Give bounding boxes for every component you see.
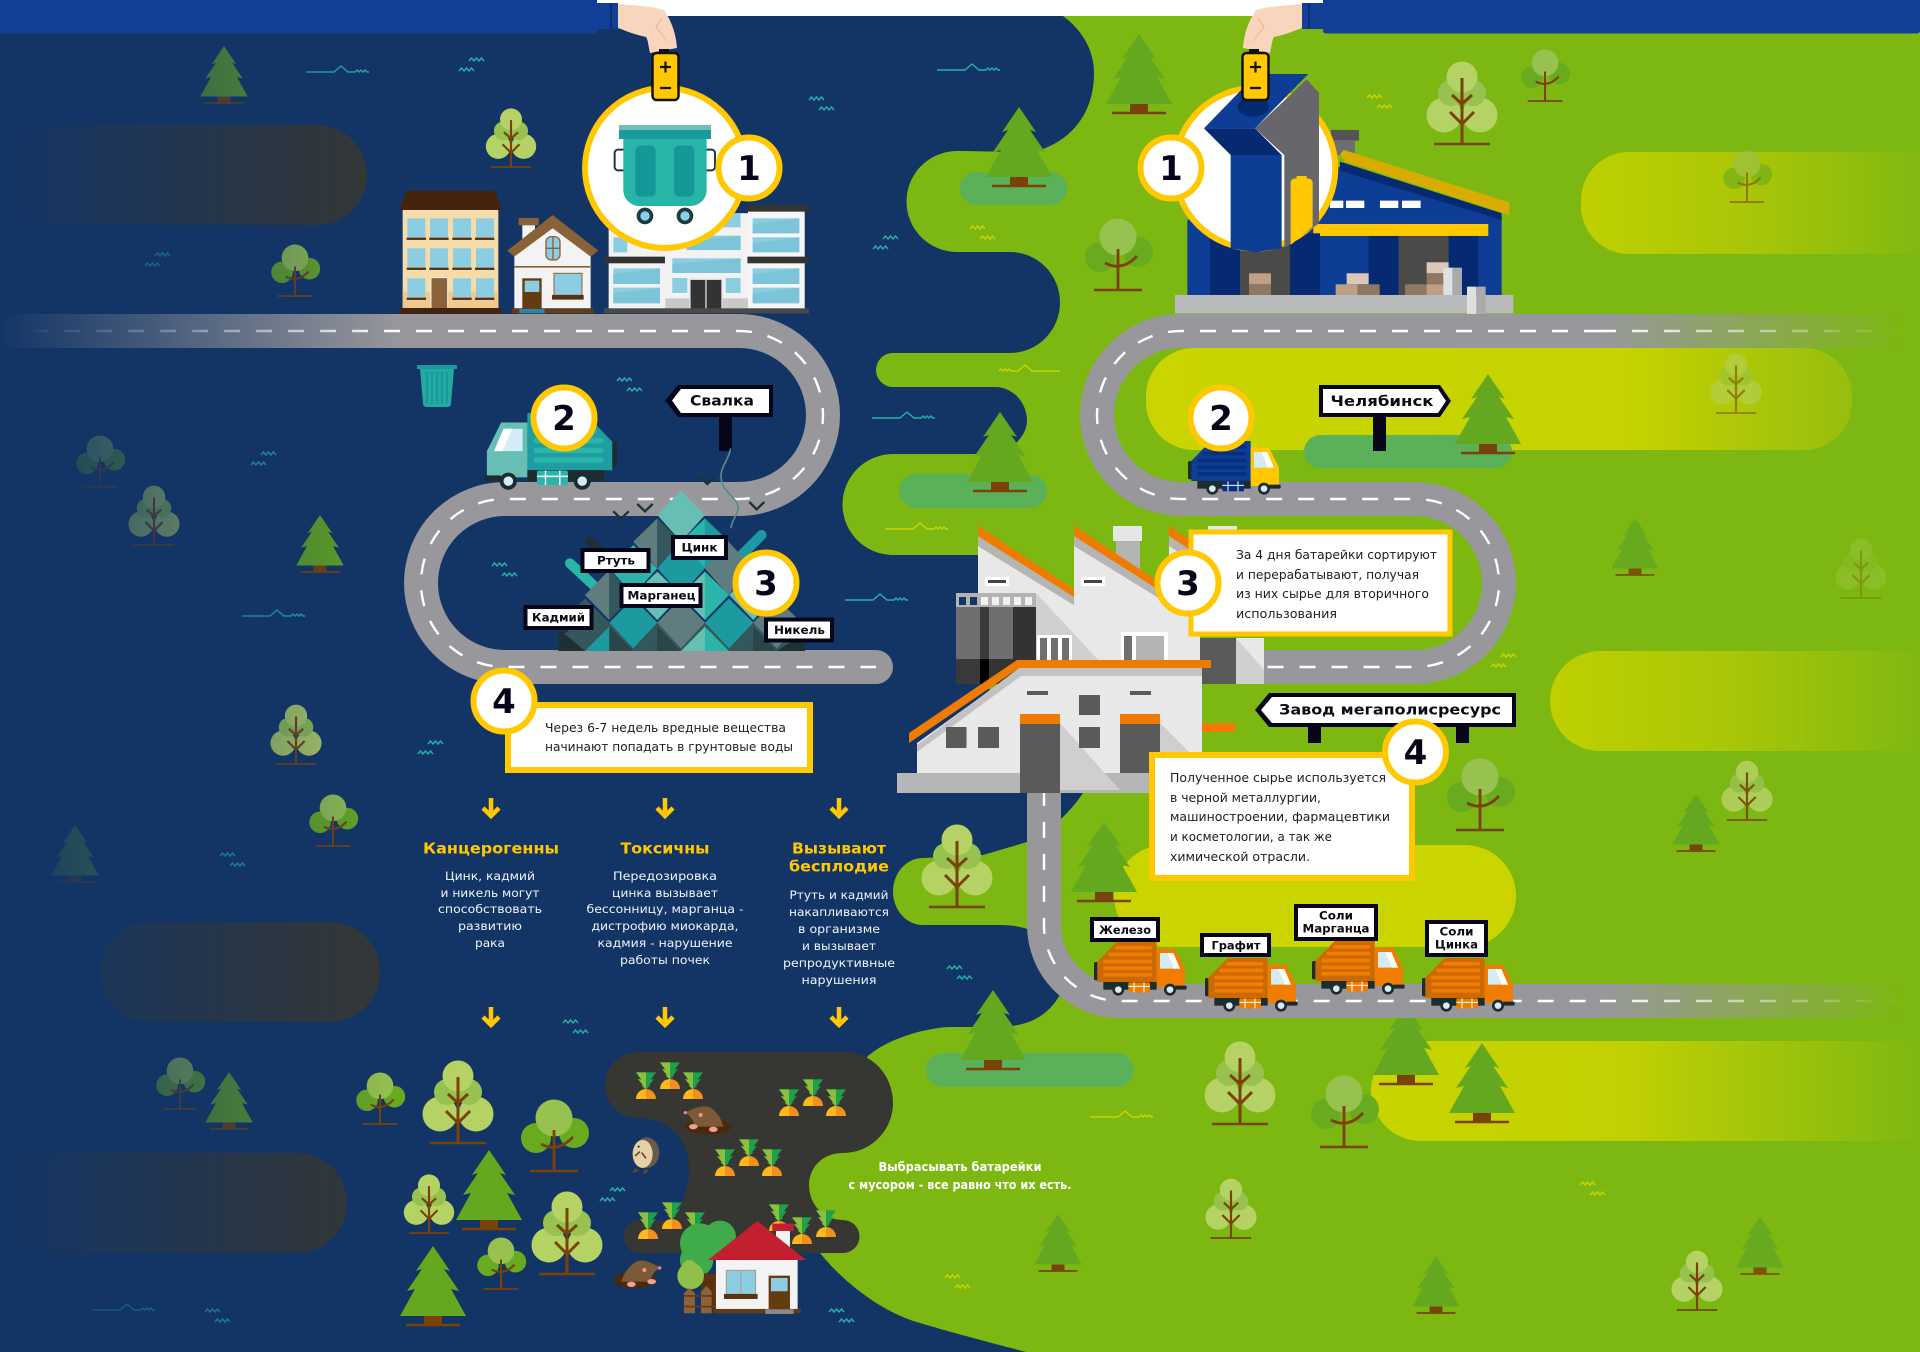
label: Никель: Никель [774, 623, 825, 637]
bottom note: Выбрасывать батарейки [878, 1160, 1042, 1174]
sign: Завод мегаполисресурс [1255, 693, 1516, 743]
column: Токсичны: работы почек [620, 953, 710, 967]
callout: step 4 left: Через 6-7 недель вредные вещества [545, 721, 786, 735]
column: Токсичны [586, 840, 744, 967]
orange truck: Железо [1092, 919, 1187, 996]
number badge 4 right [1385, 722, 1446, 782]
number badge 2 left [534, 388, 594, 448]
column: Вызывают бесплодие: Вызывают [792, 840, 886, 858]
column: Вызывают бесплодие: накапливаются [789, 905, 889, 919]
factory Мегаполисресурс [897, 526, 1264, 793]
battery left [652, 49, 678, 100]
pill: green 3 [1304, 435, 1512, 468]
icon: bin circle (left step 1) [585, 88, 745, 248]
pill: lime fading 3 [1550, 651, 1920, 751]
number badge 4 right: 4 [1404, 733, 1427, 773]
column: Вызывают бесплодие: нарушения [802, 973, 876, 987]
column: Вызывают бесплодие: Ртуть и кадмий [790, 888, 888, 902]
column: Токсичны: цинка вызывает [612, 886, 718, 900]
label: Цинк: Цинк [682, 540, 718, 554]
label: Кадмий [526, 607, 592, 628]
orange truck: Соли Цинка: Соли [1440, 924, 1474, 938]
callout: step 4 right: в черной металлургии, [1170, 791, 1321, 805]
column: Вызывают бесплодие: в организме [798, 922, 880, 936]
number badge 3 left: 3 [754, 564, 778, 604]
carrots in soil [636, 1062, 846, 1244]
orange truck: Соли Цинка [1422, 922, 1515, 1012]
label: Цинк [673, 537, 726, 558]
battery right [1242, 49, 1268, 100]
column: Вызывают бесплодие: репродуктивные [783, 956, 895, 970]
trees on navy side [51, 46, 603, 1325]
recycling plant on the right [1175, 74, 1513, 314]
sign: Челябинск: Челябинск [1330, 394, 1434, 410]
label: Ртуть [582, 550, 648, 571]
number badge 2 left: 2 [552, 399, 576, 439]
callout: step 4 right: и косметологии, а так же [1170, 830, 1332, 844]
callout: step 3 right: из них сырье для вторичного [1236, 587, 1429, 601]
number badge 2 right [1190, 388, 1252, 448]
number badge 3 left [736, 552, 796, 614]
callout: step 4 right [1152, 755, 1412, 878]
callout: step 3 right: и перерабатывают, получая [1236, 568, 1419, 582]
callout: step 4 left: начинают попадать в грунтовые воды [545, 740, 793, 754]
label: Марганец: Марганец [628, 588, 696, 602]
label: Никель [766, 620, 832, 640]
white top band [597, 0, 1323, 16]
sign: Челябинск [1319, 385, 1451, 451]
number badge 3 right [1158, 552, 1218, 614]
pill: lime fading 2 [1146, 348, 1852, 450]
column: Канцерогенны: рака [475, 936, 505, 950]
toxic waste pile [558, 448, 805, 651]
orange truck: Графит: Графит [1212, 938, 1261, 952]
orange truck: Железо: Железо [1099, 923, 1151, 937]
callout: step 4 left [508, 705, 810, 770]
pill: green 2 [899, 474, 1047, 508]
column: Токсичны: дистрофию миокарда, [592, 919, 738, 933]
pill: lime fading 4 [1371, 1041, 1920, 1141]
road: right upper serpentine [1097, 314, 1900, 667]
buildings: city on the left [399, 191, 809, 314]
callout: step 4 right: машиностроении, фармацевтики [1170, 810, 1390, 824]
icon: small trash can [417, 365, 457, 407]
number badge 1 left [718, 138, 780, 198]
number badge 4 left [474, 670, 534, 732]
mole upper [684, 1106, 732, 1135]
number badge 1 left: 1 [737, 149, 761, 189]
teal garbage truck [484, 413, 617, 490]
arrows row 1 [483, 798, 847, 816]
orange truck: Соли Цинка: Цинка [1435, 938, 1478, 952]
callout: step 3 right: использования [1236, 607, 1337, 621]
column: Вызывают бесплодие: бесплодие [789, 858, 889, 876]
callout: step 4 right: Полученное сырье используется [1170, 771, 1386, 785]
trees on green side [922, 34, 1887, 1313]
arrows row 2 [483, 1007, 847, 1025]
orange truck: Соли Марганца: Марганца [1302, 922, 1370, 936]
number badge 2 right: 2 [1209, 399, 1233, 439]
orange truck: Соли Марганца: Соли [1319, 908, 1353, 922]
column: Канцерогенны: развитию [458, 919, 522, 933]
waves: yellow on green [885, 95, 1605, 1288]
dark soil blob [605, 1052, 893, 1253]
sign: Свалка [665, 385, 773, 451]
label: Марганец [622, 585, 700, 606]
column: Канцерогенны: Цинк, кадмий [445, 869, 535, 883]
orange truck: Соли Марганца [1296, 906, 1405, 995]
column: Вызывают бесплодие: и вызывает [802, 939, 876, 953]
mole lower [613, 1261, 661, 1288]
number badge 1 right [1140, 138, 1202, 198]
column: Вызывают бесплодие [783, 840, 895, 987]
road: right lower [1044, 790, 1900, 1018]
pill: lime solid [1114, 845, 1516, 947]
waves: teal on navy [92, 58, 1000, 1322]
orange truck: Графит [1202, 935, 1298, 1012]
column: Канцерогенны: способствовать [438, 902, 542, 916]
hedgehog [633, 1138, 659, 1173]
sign: Свалка: Свалка [690, 394, 754, 410]
road: left serpentine [0, 331, 876, 667]
hand and sleeve left [0, 0, 677, 53]
pill: green 1 [960, 172, 1067, 205]
blue-yellow truck [1188, 441, 1281, 495]
pill: dark left 3 [0, 1153, 347, 1253]
column: Канцерогенны [423, 840, 559, 950]
column: Токсичны: Передозировка [613, 869, 717, 883]
cottage at the bottom [677, 1221, 806, 1314]
bottom note [848, 1160, 1072, 1192]
bottom note: с мусором - все равно что их есть. [848, 1178, 1072, 1192]
pill: dark left 2 [100, 922, 380, 1022]
column: Токсичны: Токсичны [620, 840, 710, 858]
number badge 3 right: 3 [1176, 564, 1200, 604]
label: Ртуть: Ртуть [597, 554, 635, 568]
column: Канцерогенны: и никель могут [440, 886, 540, 900]
callout: step 3 right [1191, 532, 1450, 634]
number badge 1 right: 1 [1159, 149, 1183, 189]
background: green right side [800, 16, 1920, 1352]
number badge 4 left: 4 [492, 682, 516, 722]
column: Токсичны: бессонницу, марганца - [586, 902, 744, 916]
edge fade left [0, 34, 400, 1352]
callout: step 3 right: За 4 дня батарейки сортируют [1236, 548, 1437, 562]
callout: step 4 right: химической отрасли. [1170, 850, 1310, 864]
hand and sleeve right [1243, 0, 1920, 53]
column: Токсичны: кадмия - нарушение [598, 936, 732, 950]
pill: green 4 [926, 1053, 1134, 1087]
pill: dark left 1 [0, 125, 367, 225]
sign: Завод мегаполисресурс: Завод мегаполисресурс [1279, 702, 1501, 718]
pill: lime fading 1 [1581, 152, 1920, 254]
column: Канцерогенны: Канцерогенны [423, 840, 559, 858]
label: Кадмий: Кадмий [532, 610, 585, 624]
